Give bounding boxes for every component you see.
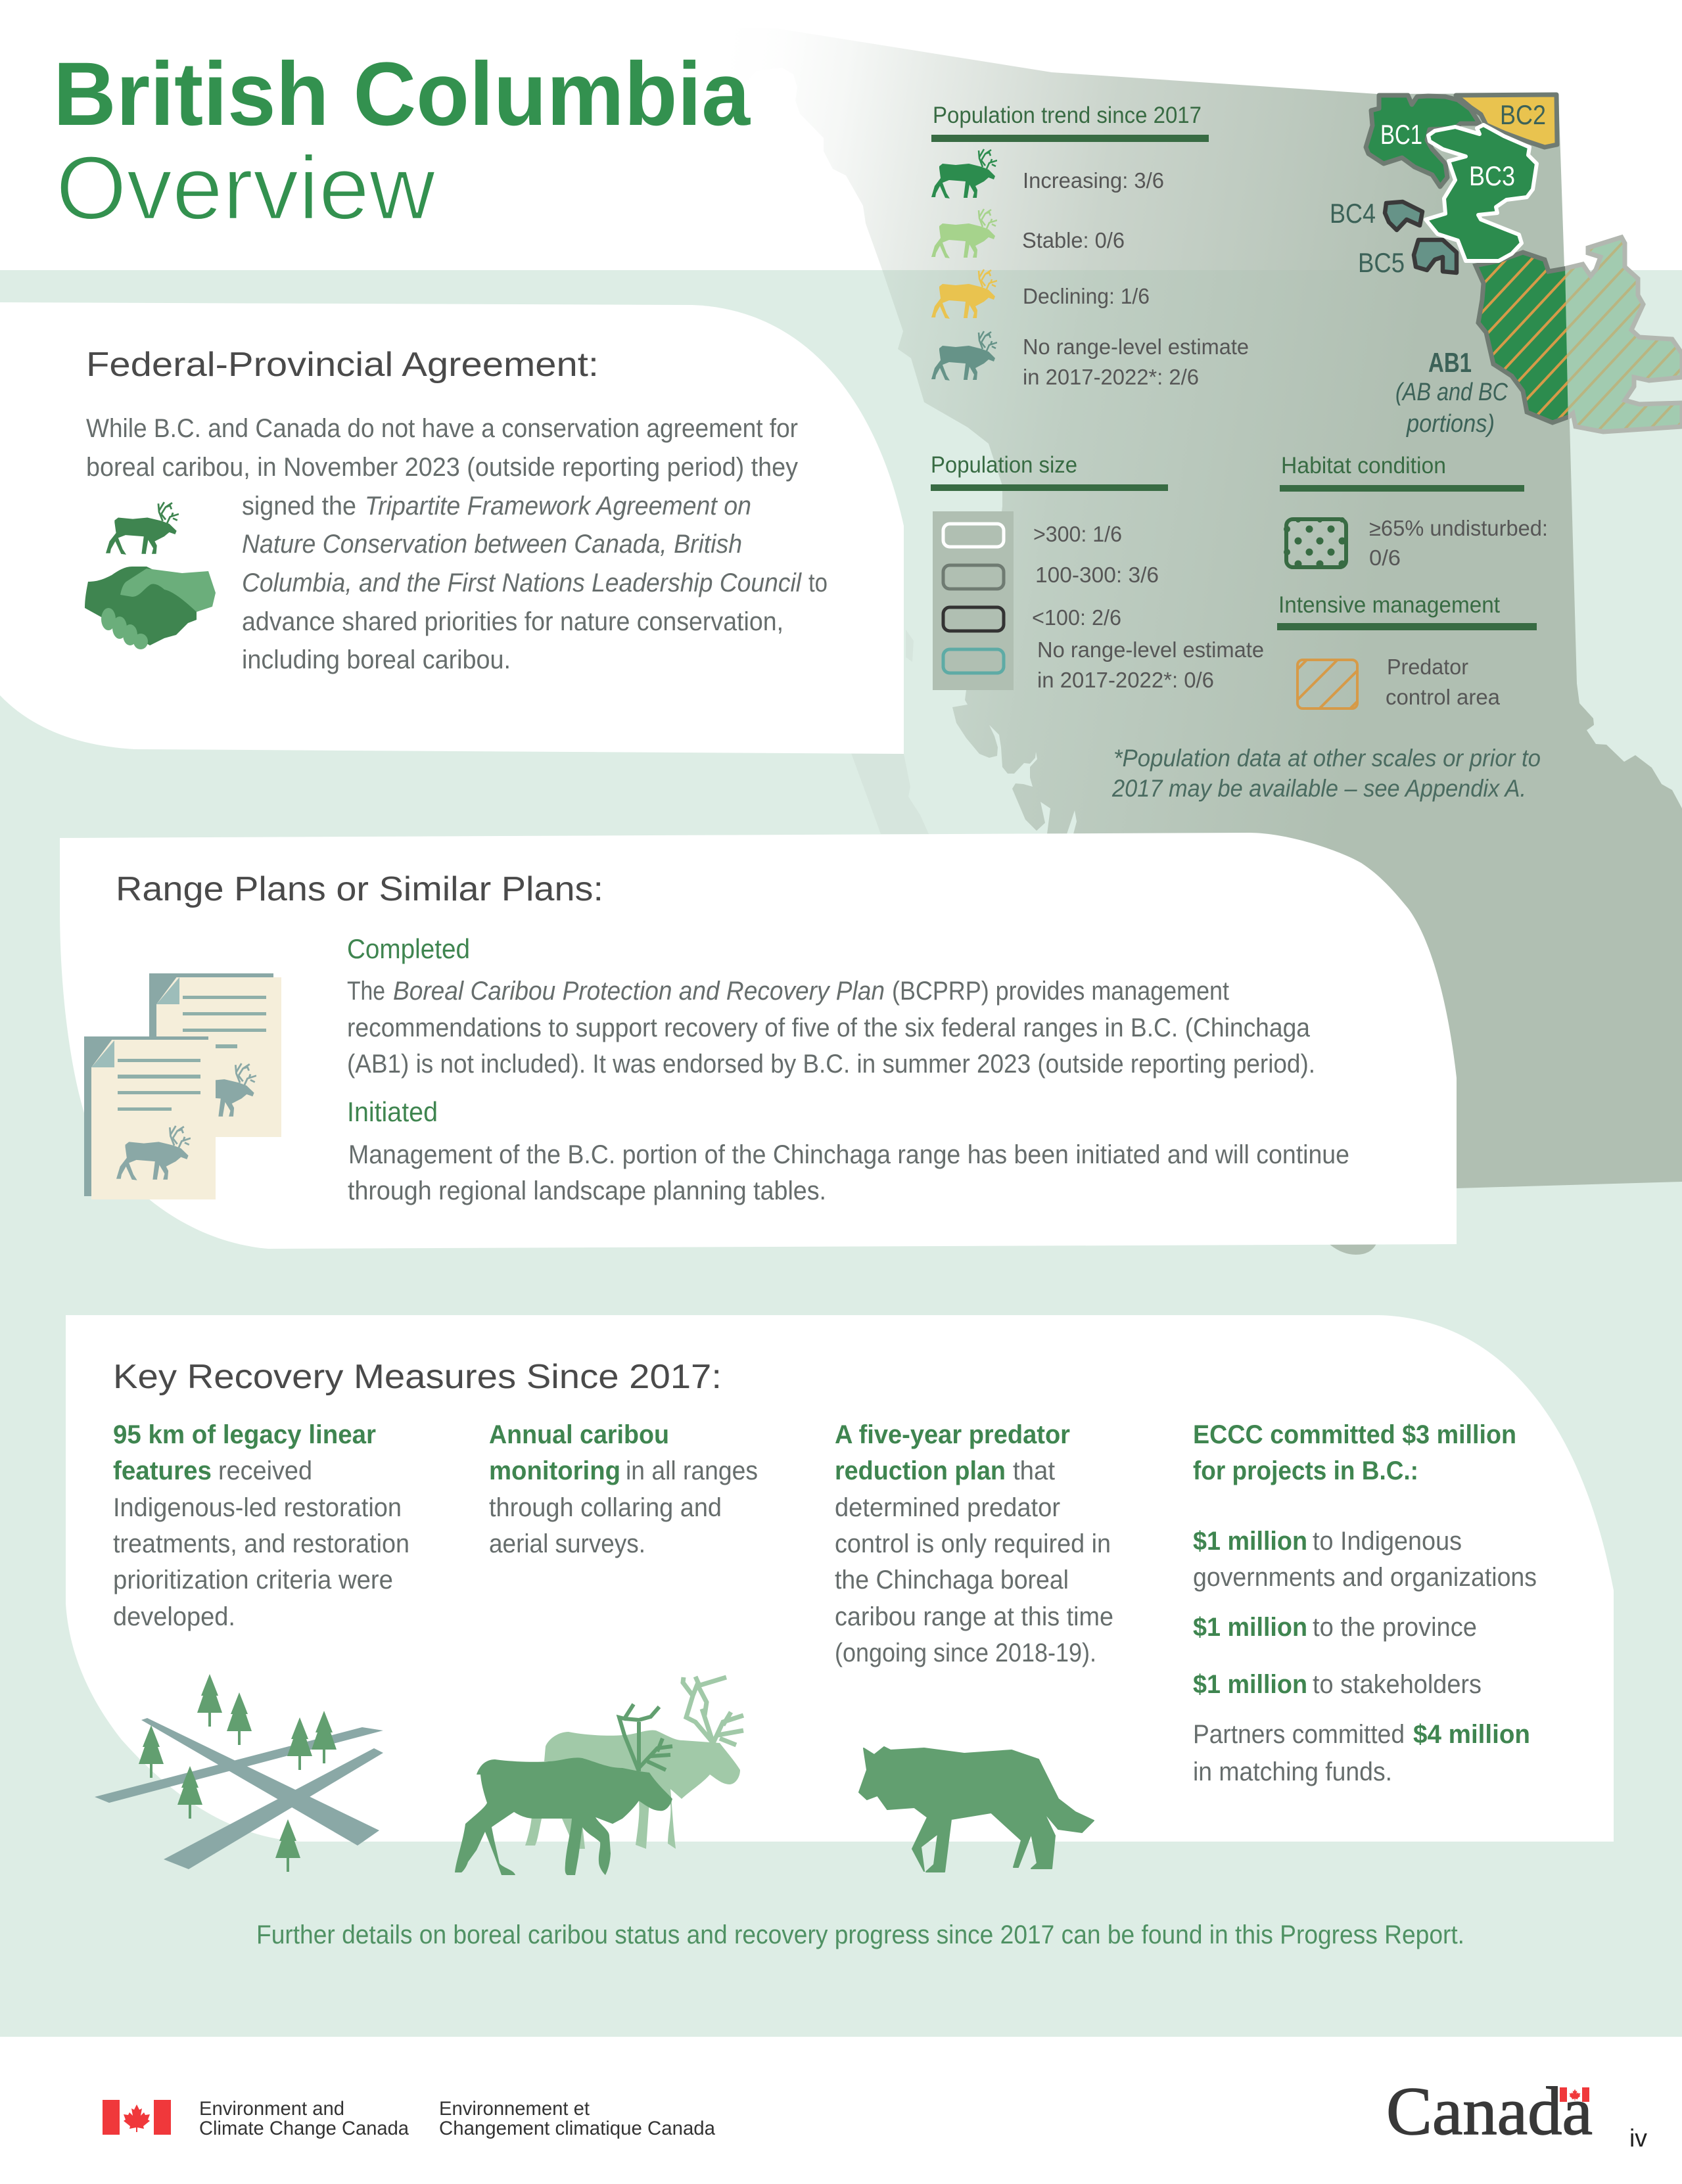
swatch: 100-300	[943, 565, 1004, 589]
legend: population trend: Increasing: 3/6	[1023, 168, 1164, 193]
column: funding: Partners committed	[1193, 1720, 1405, 1749]
illustration: linear features with trees	[95, 1674, 383, 1872]
column: predator plan: reduction plan	[835, 1456, 1006, 1485]
range: AB1 Alberta portion	[1565, 234, 1682, 434]
illustration: two caribou	[455, 1677, 743, 1875]
body text: While B.C. and Canada do not have a conservation agreement for	[86, 414, 798, 443]
range: BC3	[1426, 125, 1537, 261]
body text: Nature Conservation between Canada, British	[242, 530, 742, 559]
column: linear features: features	[113, 1456, 212, 1485]
front caribou	[455, 1704, 672, 1875]
body text: Columbia, and the First Nations Leadership Council	[242, 569, 802, 597]
legend: population size: in 2017-2022*: 0/6	[1037, 668, 1214, 692]
column: funding	[1193, 1420, 1537, 1786]
legend: population size: <100: 2/6	[1032, 605, 1121, 630]
swatch: under 100	[943, 607, 1004, 631]
completed text: (AB1) is not included). It was endorsed by B.C. in summer 2023 (outside reporting period).	[347, 1050, 1315, 1079]
column: predator plan: control is only required in	[835, 1529, 1111, 1558]
label: AB1: (AB and BC	[1395, 379, 1508, 406]
initiated text	[348, 1140, 1349, 1205]
back document	[149, 973, 281, 1137]
panel: key recovery measures	[66, 1315, 1614, 1842]
column: monitoring: in all ranges	[626, 1456, 758, 1485]
label: BC4: BC4	[1330, 198, 1376, 229]
completed text: The	[347, 977, 385, 1006]
title	[53, 44, 751, 239]
icon: predator control hatch	[1297, 660, 1357, 709]
logo: Canada wordmark: Canada	[1386, 2074, 1593, 2149]
page number: iv	[1629, 2125, 1647, 2152]
column: predator plan: the Chinchaga boreal	[835, 1566, 1069, 1594]
body text: advance shared priorities for nature conservation,	[242, 607, 783, 636]
legend: intensive management	[1277, 592, 1537, 709]
panel: range plans	[60, 833, 1457, 1249]
column: linear features: Indigenous-led restoration	[113, 1493, 402, 1522]
legend: habitat condition: ≥65% undisturbed:	[1369, 516, 1548, 540]
title: British Columbia	[53, 44, 751, 145]
initiated text: Management of the B.C. portion of the Chinchaga range has been initiated and will continue	[348, 1140, 1349, 1169]
column: linear features	[113, 1420, 409, 1631]
icon: stippled habitat swatch	[1284, 517, 1346, 568]
icon: stable caribou	[931, 209, 997, 258]
column: monitoring: Annual caribou	[489, 1420, 669, 1449]
body text: boreal caribou, in November 2023 (outside reporting period) they	[86, 453, 798, 482]
column: predator plan: A five-year predator	[835, 1420, 1070, 1449]
legend heading: Population size	[931, 452, 1077, 478]
label: BC5: BC5	[1358, 247, 1405, 278]
legend: population size: No range-level estimate	[1037, 638, 1264, 662]
legend: habitat condition: 0/6	[1369, 546, 1401, 570]
map: British Columbia silhouette	[657, 28, 1682, 1255]
column: predator plan: that	[1013, 1456, 1055, 1485]
subheading: initiated: Initiated	[347, 1096, 438, 1127]
footnote: 2017 may be available – see Appendix A.	[1111, 775, 1526, 802]
completed text: Boreal Caribou Protection and Recovery Plan	[393, 977, 885, 1006]
icon: increasing caribou	[931, 149, 997, 198]
logo: ECCC signature: Changement climatique Canada	[439, 2118, 715, 2139]
icon: Canada flag	[103, 2100, 171, 2135]
icon: plan documents	[84, 973, 281, 1199]
column: linear features: prioritization criteria were	[113, 1566, 393, 1594]
column: predator plan	[835, 1420, 1113, 1667]
logo: ECCC signature	[103, 2098, 715, 2139]
icon: caribou over handshake	[85, 502, 216, 649]
label: BC2: BC2	[1500, 99, 1546, 130]
completed text: (BCPRP) provides management	[892, 977, 1229, 1006]
body text: to	[808, 569, 828, 597]
heading: Range Plans or Similar Plans:	[116, 870, 603, 908]
column: funding: $1 million	[1193, 1613, 1307, 1642]
heading: Federal-Provincial Agreement:	[86, 346, 599, 384]
legend heading: Population trend since 2017	[933, 103, 1202, 128]
subheading: completed: Completed	[347, 933, 470, 964]
column: monitoring	[489, 1420, 758, 1558]
label: BC3: BC3	[1469, 160, 1515, 191]
body text: signed the	[242, 492, 356, 521]
legend: intensive management: Predator	[1387, 655, 1468, 679]
title: Overview	[56, 138, 436, 239]
column: funding: $4 million	[1413, 1720, 1530, 1749]
body text: Tripartite Framework Agreement on	[365, 492, 751, 521]
column: monitoring: through collaring and	[489, 1493, 722, 1522]
column: funding: ECCC committed $3 million	[1193, 1420, 1516, 1449]
initiated text: through regional landscape planning tables.	[348, 1176, 826, 1205]
column: funding: governments and organizations	[1193, 1563, 1537, 1592]
heading: Key Recovery Measures Since 2017:	[113, 1358, 722, 1396]
legend: population trend: in 2017-2022*: 2/6	[1023, 365, 1199, 389]
front document	[84, 1036, 216, 1199]
swatch: over 300	[943, 524, 1004, 547]
legend: population trend: No range-level estimate	[1023, 335, 1249, 359]
column: funding: to stakeholders	[1313, 1670, 1482, 1699]
range: BC4	[1385, 202, 1422, 230]
legend: population size	[931, 452, 1264, 692]
legend: population trend: Declining: 1/6	[1023, 284, 1150, 308]
column: predator plan: determined predator	[835, 1493, 1060, 1522]
legend: population size: >300: 1/6	[1033, 522, 1122, 546]
column: linear features: 95 km of legacy linear	[113, 1420, 376, 1449]
column: funding: for projects in B.C.:	[1193, 1456, 1418, 1485]
label: AB1: AB1	[1428, 347, 1472, 378]
footnote: *Population data at other scales or prior to	[1113, 745, 1541, 772]
completed text	[347, 977, 1315, 1079]
icon: no estimate caribou	[931, 331, 997, 381]
panel: federal-provincial agreement	[0, 302, 904, 754]
column: linear features: received	[218, 1456, 312, 1485]
column: linear features: treatments, and restoration	[113, 1529, 409, 1558]
icon: declining caribou	[931, 269, 997, 319]
legend heading: Intensive management	[1278, 592, 1500, 618]
column: monitoring: aerial surveys.	[489, 1529, 645, 1558]
completed text: recommendations to support recovery of five of the six federal ranges in B.C. (Chinchaga	[347, 1013, 1311, 1042]
column: funding: $1 million	[1193, 1527, 1307, 1556]
range: BC2	[1456, 95, 1557, 147]
column: predator plan: caribou range at this time	[835, 1602, 1113, 1631]
label: BC1: BC1	[1380, 119, 1422, 150]
body text: including boreal caribou.	[242, 645, 511, 674]
legend: population trend: Stable: 0/6	[1022, 228, 1125, 252]
column: funding: $1 million	[1193, 1670, 1307, 1699]
column: funding: in matching funds.	[1193, 1757, 1392, 1786]
range: BC1	[1366, 95, 1480, 187]
legend: population size: 100-300: 3/6	[1035, 563, 1159, 587]
legend heading: Habitat condition	[1281, 453, 1446, 478]
legend: habitat condition	[1280, 453, 1548, 570]
illustration: wolf	[859, 1747, 1094, 1872]
rear caribou	[525, 1677, 743, 1849]
logo: ECCC signature: Environnement et	[439, 2098, 590, 2120]
column: funding: to Indigenous	[1313, 1527, 1462, 1556]
logo: ECCC signature: Climate Change Canada	[199, 2118, 409, 2139]
logo: ECCC signature: Environment and	[199, 2098, 344, 2120]
swatch: no estimate	[943, 649, 1004, 673]
legend: population trend	[931, 103, 1249, 389]
range map	[1330, 95, 1682, 438]
further details note: Further details on boreal caribou status and recovery progress since 2017 can be found in this Progress Report.	[256, 1920, 1464, 1949]
label: AB1	[1395, 347, 1508, 438]
column: linear features: developed.	[113, 1602, 235, 1631]
range: BC5	[1414, 240, 1457, 273]
body text	[86, 414, 828, 674]
range: AB1 BC portion	[1472, 250, 1568, 425]
column: funding: to the province	[1313, 1613, 1477, 1642]
label: AB1: portions)	[1406, 410, 1495, 438]
legend: intensive management: control area	[1386, 685, 1501, 709]
footnote	[1111, 745, 1541, 802]
column: predator plan: (ongoing since 2018-19).	[835, 1638, 1096, 1667]
column: monitoring: monitoring	[489, 1456, 620, 1485]
